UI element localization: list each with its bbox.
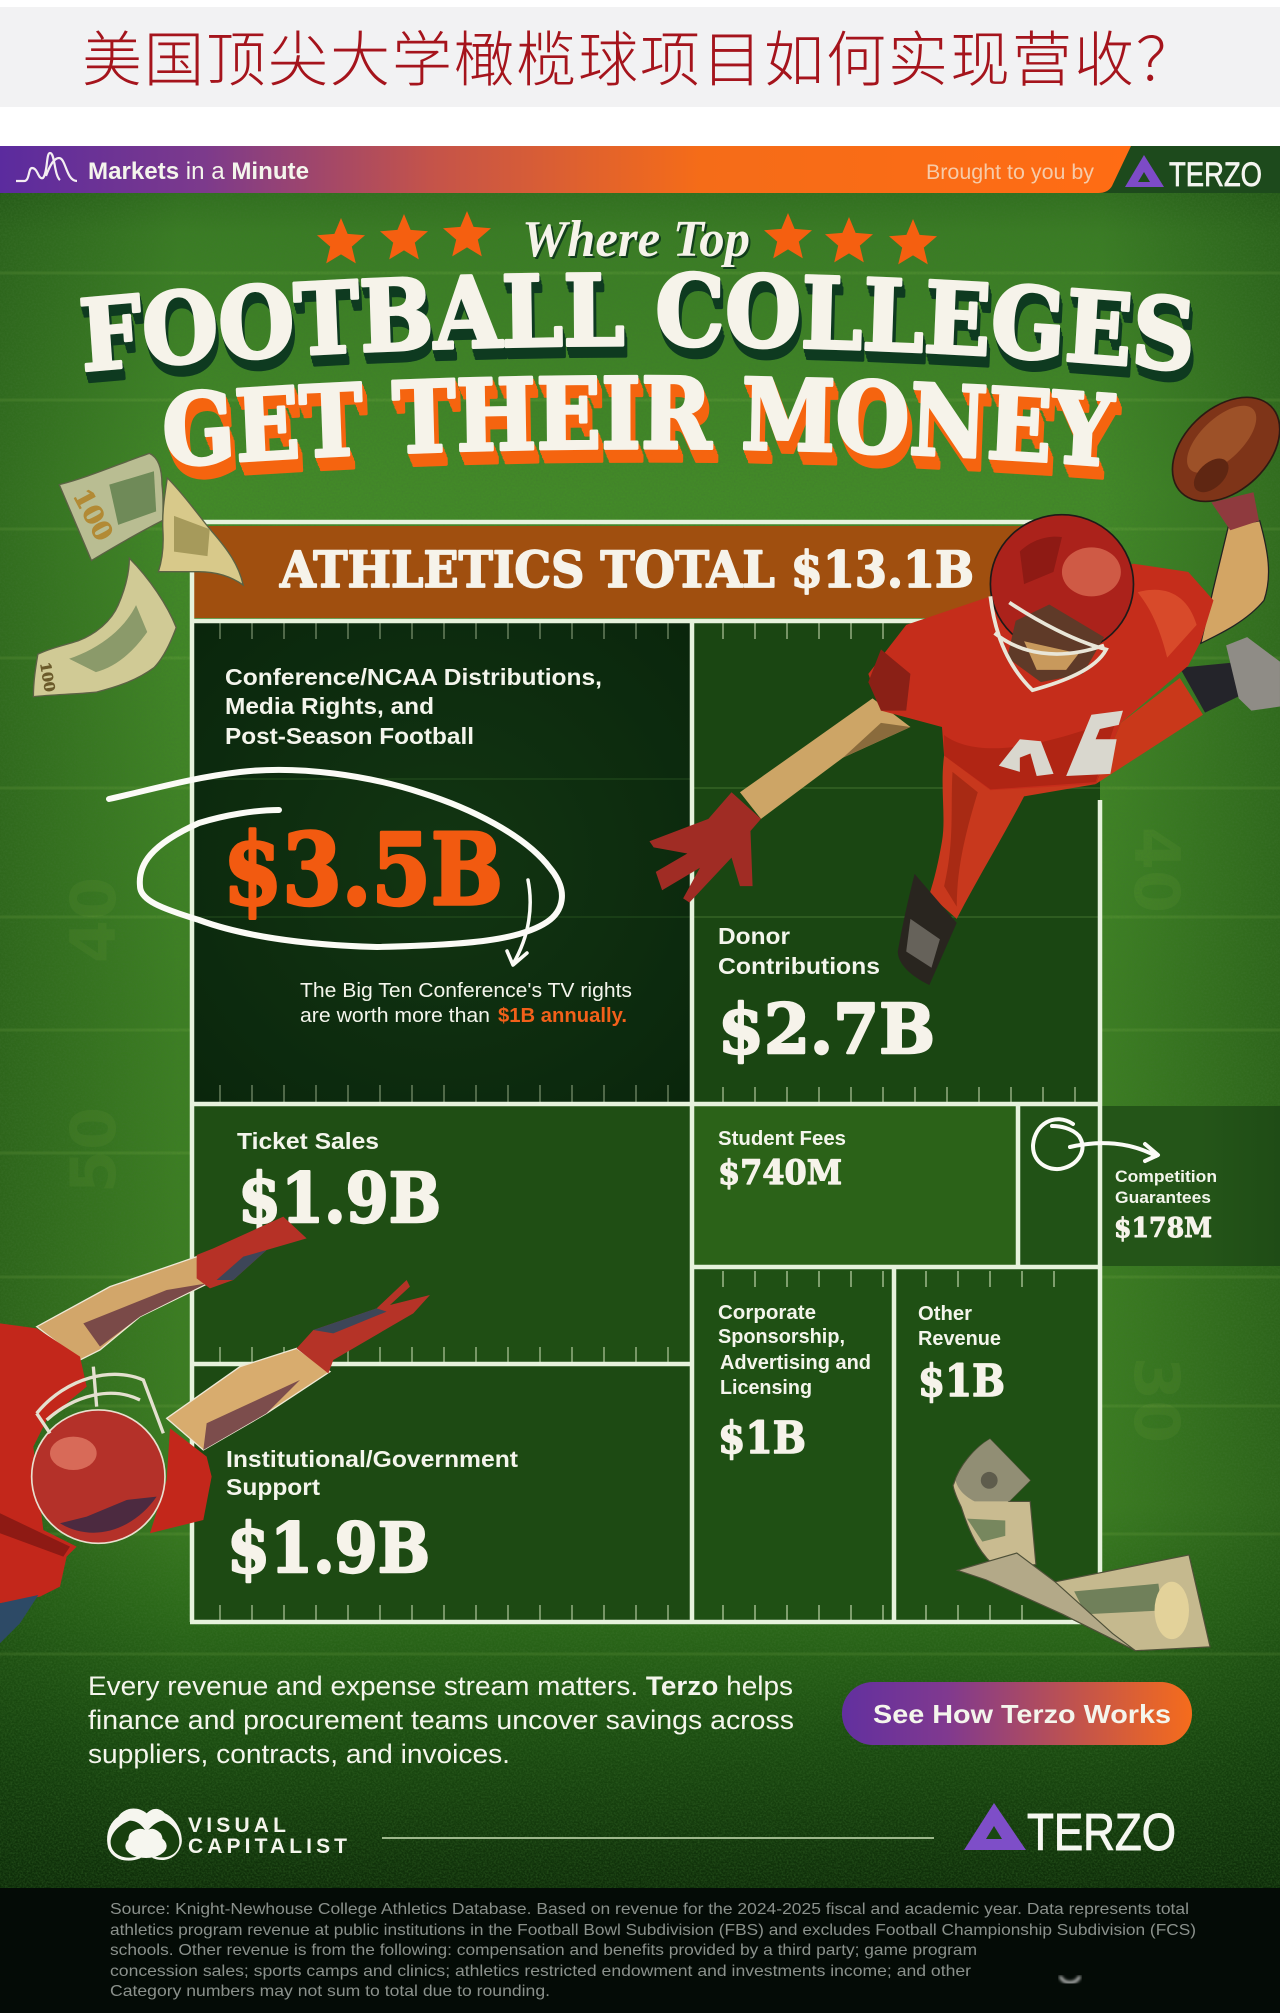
source footer xyxy=(0,1888,1280,2013)
note xyxy=(300,980,632,1027)
panel: corporate sponsorship xyxy=(692,1267,894,1622)
upper arm xyxy=(37,1257,208,1360)
face mask xyxy=(37,1367,163,1433)
source footer: athletics program revenue at public institutions in the Football Bowl Subdivision (FBS) and excludes Football Championship Subdivision (FCS) xyxy=(110,1922,1196,1939)
football field background: 40 xyxy=(1120,827,1193,913)
panel: institutional/government support xyxy=(192,1364,692,1622)
helmet xyxy=(32,1410,165,1543)
icon: markets wave logo xyxy=(16,153,77,181)
title block xyxy=(80,211,1194,480)
value: $1B xyxy=(918,1356,1005,1407)
heading line 2: GET THEIR MONEY xyxy=(164,374,1122,480)
button xyxy=(842,1682,1192,1745)
label xyxy=(918,1303,1001,1350)
value: $178M xyxy=(1114,1213,1212,1244)
logo: Terzo large: TERZO xyxy=(1027,1804,1176,1862)
button: See How Terzo Works xyxy=(873,1699,1171,1729)
note: The Big Ten Conference's TV rights xyxy=(300,980,632,1002)
label: Contributions xyxy=(718,953,880,979)
label: Ticket Sales xyxy=(237,1128,379,1154)
wrist band xyxy=(1211,492,1259,530)
value: $2.7B xyxy=(718,990,935,1070)
stars xyxy=(317,211,937,264)
sponsor logo: Terzo xyxy=(1125,155,1262,194)
upper glove xyxy=(197,1217,307,1288)
hand-drawn ellipse around value xyxy=(109,770,562,947)
label: Donor xyxy=(718,923,790,949)
arrow: from value to note xyxy=(507,880,530,965)
note: $1B annually. xyxy=(498,1005,627,1027)
label xyxy=(718,1302,871,1399)
call to action text: Every revenue and expense stream matters. Terzo helps xyxy=(88,1671,793,1701)
total text: ATHLETICS TOTAL $13.1B xyxy=(279,540,974,599)
label xyxy=(225,664,602,749)
label: Institutional/Government xyxy=(226,1446,518,1472)
panel: student fees xyxy=(692,1104,1018,1267)
chinese title: 美国顶尖大学橄榄球项目如何实现营收？ xyxy=(82,27,1198,94)
lower arm xyxy=(167,1348,330,1450)
divider line xyxy=(382,1837,934,1839)
label: Licensing xyxy=(720,1377,812,1399)
source footer: Category numbers may not sum to total due to rounding. xyxy=(110,1983,550,2000)
label: Guarantees xyxy=(1115,1188,1211,1207)
field grid lines xyxy=(190,522,1100,1622)
raised arm xyxy=(1201,521,1269,643)
panel: ticket sales xyxy=(192,1104,692,1364)
markets in a minute wordmark: Markets in a Minute xyxy=(88,158,309,185)
label xyxy=(226,1446,518,1500)
top banner xyxy=(0,146,1280,194)
value: $1.9B xyxy=(238,1159,441,1239)
football field background: 50 xyxy=(57,1107,130,1193)
icon: money bills right xyxy=(953,1439,1210,1651)
page title band xyxy=(0,7,1280,107)
value: $3.5B xyxy=(223,813,503,928)
label xyxy=(1115,1167,1217,1207)
reaching arm xyxy=(740,698,910,819)
panel: other revenue xyxy=(894,1267,1100,1622)
value: $1B xyxy=(718,1413,806,1464)
label: Advertising and xyxy=(720,1352,871,1374)
value: $1.9B xyxy=(227,1509,430,1589)
panel: competition guarantees xyxy=(1018,1104,1217,1267)
boot xyxy=(898,874,957,985)
logo: Visual Capitalist: VISUAL xyxy=(188,1814,286,1837)
icon: piggy emblem xyxy=(107,1809,182,1861)
competition strip behind field edge xyxy=(1018,1106,1280,1266)
label: Corporate xyxy=(718,1302,816,1324)
lower glove xyxy=(297,1280,430,1373)
jersey xyxy=(868,564,1213,790)
leg xyxy=(0,1595,38,1643)
label: Media Rights, and xyxy=(225,693,434,719)
label: Competition xyxy=(1115,1167,1217,1186)
logo: Terzo large xyxy=(964,1803,1176,1862)
football field background: 30 xyxy=(1120,1357,1193,1443)
label: Support xyxy=(226,1474,320,1500)
label: Revenue xyxy=(918,1328,1001,1350)
label: Other xyxy=(918,1303,972,1325)
label: Student Fees xyxy=(718,1128,846,1150)
illustration: player bottom left xyxy=(0,1217,430,1643)
circle and arrow: competition guarantees xyxy=(1033,1119,1158,1169)
panel: donor contributions xyxy=(692,621,1100,1104)
call to action text xyxy=(88,1671,794,1769)
jersey number xyxy=(999,711,1123,776)
icon: money bills left xyxy=(33,453,243,697)
front leg xyxy=(929,756,1096,919)
label: Conference/NCAA Distributions, xyxy=(225,664,602,690)
script heading: Where Top xyxy=(522,211,750,268)
logo: Visual Capitalist xyxy=(107,1809,347,1861)
rear leg xyxy=(1180,662,1251,713)
label: Sponsorship, xyxy=(718,1326,845,1348)
call to action text: finance and procurement teams uncover savings across xyxy=(88,1705,794,1735)
note: are worth more than xyxy=(300,1005,490,1027)
source footer: schools. Other revenue is from the following: compensation and benefits provided by a third party; game program xyxy=(110,1942,977,1959)
football field background: 40 xyxy=(57,877,130,963)
value: $740M xyxy=(718,1153,842,1193)
source footer: Source: Knight-Newhouse College Athletics Database. Based on revenue for the 2024-2025 fiscal and academic year. Data represents total xyxy=(110,1901,1189,1918)
call to action text: suppliers, contracts, and invoices. xyxy=(88,1739,510,1769)
logo: Visual Capitalist: CAPITALIST xyxy=(188,1835,347,1858)
sponsor line: Brought to you by xyxy=(926,161,1095,184)
glove xyxy=(649,792,761,902)
illustration: leaping player top right xyxy=(649,377,1280,985)
icon: money bills left: 100 xyxy=(36,661,57,693)
football xyxy=(1152,377,1280,522)
label xyxy=(718,923,880,979)
helmet xyxy=(990,515,1133,690)
source footer: concession sales; sports camps and clinics; athletics restricted endowment and investments income; and other xyxy=(110,1963,972,1980)
icon: money bills left: 100 xyxy=(66,484,118,546)
panel: conference / NCAA xyxy=(192,621,692,1104)
heading line 1: FOOTBALL COLLEGES xyxy=(80,270,1194,384)
label: Post-Season Football xyxy=(225,723,474,749)
total header band xyxy=(192,526,1032,618)
jersey xyxy=(0,1323,87,1603)
